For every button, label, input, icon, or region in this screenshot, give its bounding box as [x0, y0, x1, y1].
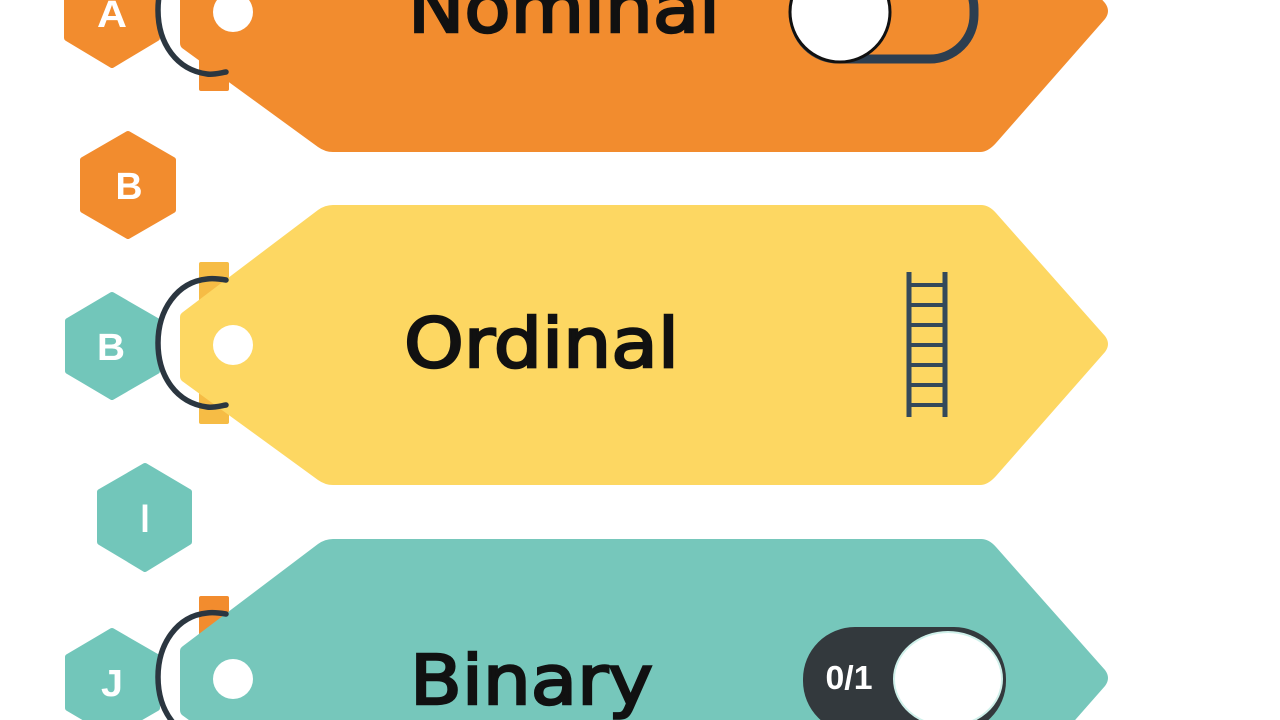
- tag: Ordinal: [158, 205, 1108, 485]
- hexagon badge: I: [100, 466, 189, 569]
- icon: 0/1 toggle switch: [803, 627, 1006, 720]
- hexagon badge: I: I: [140, 497, 150, 541]
- tag body: teal: [180, 539, 1108, 720]
- tag hole: [213, 325, 253, 365]
- icon: 0/1 toggle switch: 0/1: [826, 659, 872, 696]
- label: Ordinal: Ordinal: [404, 304, 679, 384]
- tag body: orange: [180, 0, 1108, 152]
- tag clip tab: orange: [199, 0, 229, 91]
- hexagon badge: B teal: B: [97, 327, 125, 369]
- hexagon badge: B orange: [83, 134, 173, 236]
- hexagon badge: J: [68, 631, 157, 720]
- hexagon badge: B orange: B: [116, 166, 142, 208]
- tag ring: [158, 0, 226, 74]
- tag hole: [213, 0, 253, 32]
- tag hole: [213, 659, 253, 699]
- tag ring: [158, 279, 226, 407]
- tag body: yellow: [180, 205, 1108, 485]
- hexagon badge: J: J: [101, 663, 123, 705]
- tag ring: [158, 613, 226, 720]
- tag: Binary: [158, 539, 1108, 720]
- tag clip tab: orange: [199, 596, 229, 720]
- hexagon badge: B teal: [68, 295, 157, 397]
- label: Binary: Binary: [410, 641, 653, 720]
- icon: ladder: [909, 272, 945, 417]
- icon: toggle switch: [790, 0, 974, 62]
- tag clip tab: amber: [199, 262, 229, 424]
- hexagon badge: A: [67, 0, 157, 65]
- tag: Nominal: [158, 0, 1108, 152]
